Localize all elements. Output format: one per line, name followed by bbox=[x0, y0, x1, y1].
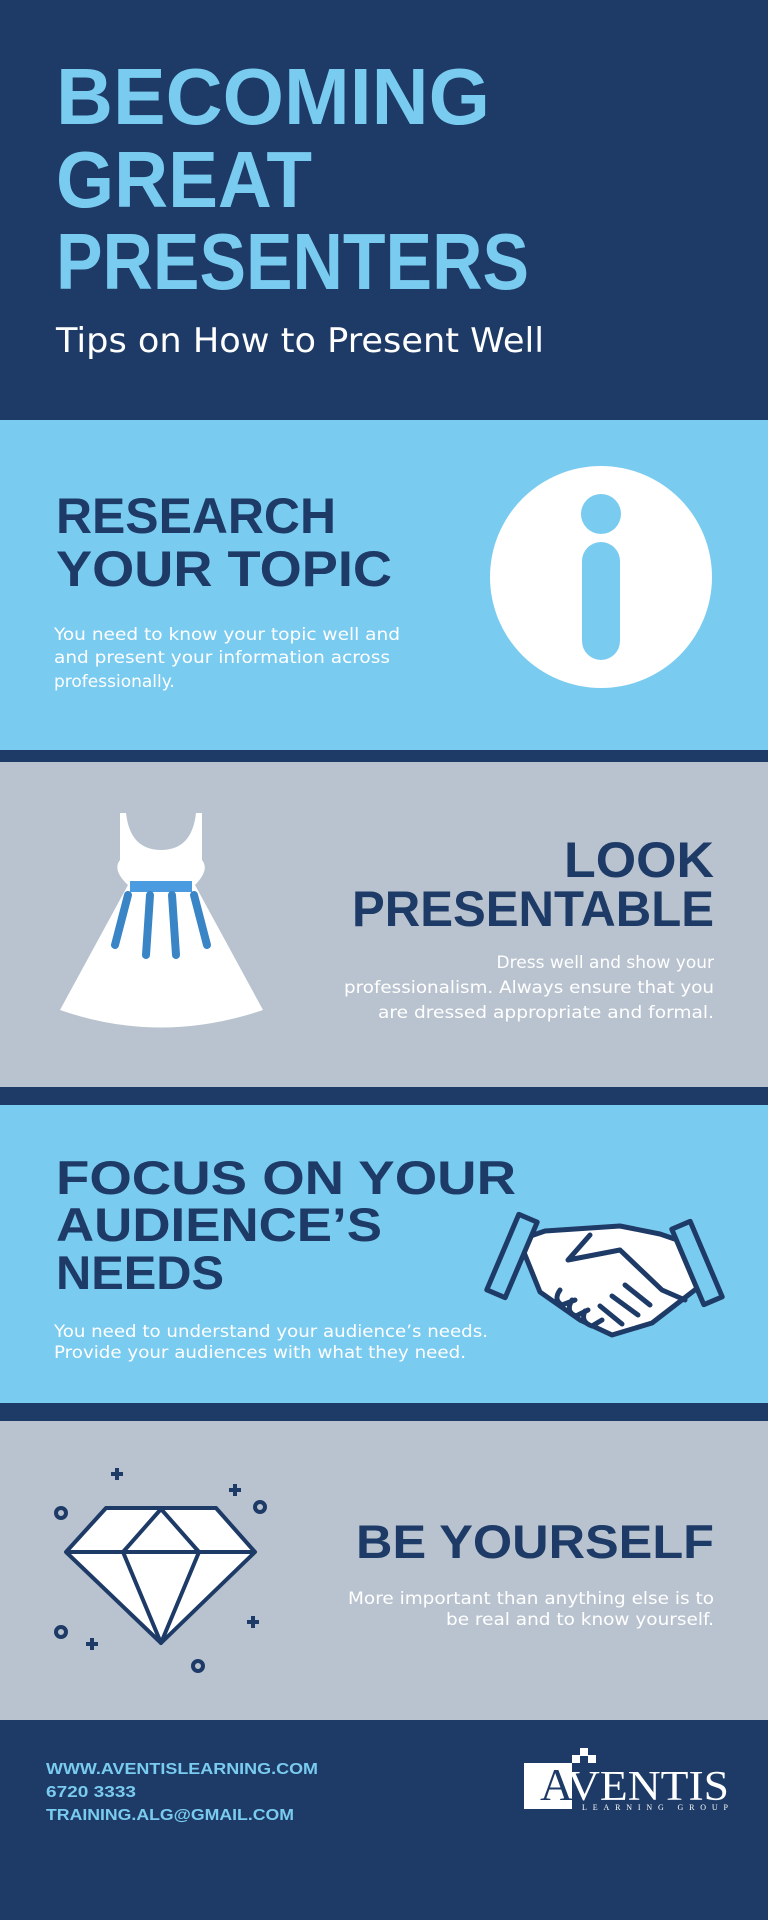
contact info bbox=[46, 1761, 318, 1824]
icon: handshake bbox=[487, 1214, 722, 1335]
heading: be yourself: BE YOURSELF bbox=[356, 1515, 714, 1568]
title: PRESENTERS bbox=[56, 217, 529, 306]
title: BECOMING bbox=[56, 52, 490, 141]
heading: focus: NEEDS bbox=[56, 1246, 224, 1299]
icon: diamond bbox=[56, 1468, 265, 1671]
panel: research your topic bbox=[0, 420, 768, 750]
text: focus: You need to understand your audience’s needs. bbox=[53, 1322, 488, 1342]
text: focus bbox=[53, 1322, 488, 1363]
panel: footer bbox=[46, 1748, 729, 1824]
panel: focus on audience bbox=[0, 1105, 768, 1403]
logo bbox=[524, 1748, 729, 1812]
heading: research bbox=[56, 488, 392, 597]
panel: header bbox=[0, 0, 768, 420]
heading: look presentable bbox=[352, 832, 714, 937]
text: research: You need to know your topic well and bbox=[53, 625, 400, 645]
logo: LEARNING GROUP bbox=[582, 1803, 729, 1812]
icon: info bbox=[490, 466, 712, 688]
heading: look presentable: LOOK bbox=[564, 832, 714, 888]
text: research: and present your information across bbox=[54, 648, 390, 668]
heading: research: RESEARCH bbox=[56, 488, 336, 544]
text: look presentable: professionalism. Always ensure that you bbox=[344, 978, 714, 998]
title bbox=[56, 52, 529, 306]
text: look presentable: are dressed appropriate and formal. bbox=[378, 1003, 714, 1023]
contact info: WWW.AVENTISLEARNING.COM bbox=[46, 1761, 318, 1778]
text: be yourself bbox=[348, 1589, 714, 1630]
heading: focus: AUDIENCE’S bbox=[56, 1198, 382, 1251]
text: look presentable: Dress well and show your bbox=[497, 953, 714, 973]
text: research bbox=[53, 625, 400, 692]
text: research: professionally. bbox=[54, 672, 175, 692]
logo: VENTIS bbox=[567, 1764, 729, 1810]
heading: look presentable: PRESENTABLE bbox=[352, 881, 714, 937]
text: focus: Provide your audiences with what they need. bbox=[54, 1343, 466, 1363]
logo: A bbox=[540, 1759, 573, 1810]
panel: be yourself bbox=[0, 1421, 768, 1720]
heading: research: YOUR TOPIC bbox=[56, 541, 392, 597]
text: be yourself: be real and to know yourself. bbox=[446, 1610, 714, 1630]
contact info: 6720 3333 bbox=[46, 1784, 136, 1801]
panel: look presentable bbox=[0, 762, 768, 1087]
icon: dress bbox=[60, 813, 263, 1028]
text: look presentable bbox=[344, 953, 714, 1023]
text: be yourself: More important than anything else is to bbox=[348, 1589, 714, 1609]
title: GREAT bbox=[56, 135, 312, 224]
heading: focus bbox=[56, 1151, 516, 1299]
contact info: TRAINING.ALG@GMAIL.COM bbox=[46, 1807, 294, 1824]
subtitle: Tips on How to Present Well bbox=[55, 321, 544, 361]
heading: focus: FOCUS ON YOUR bbox=[56, 1151, 516, 1204]
